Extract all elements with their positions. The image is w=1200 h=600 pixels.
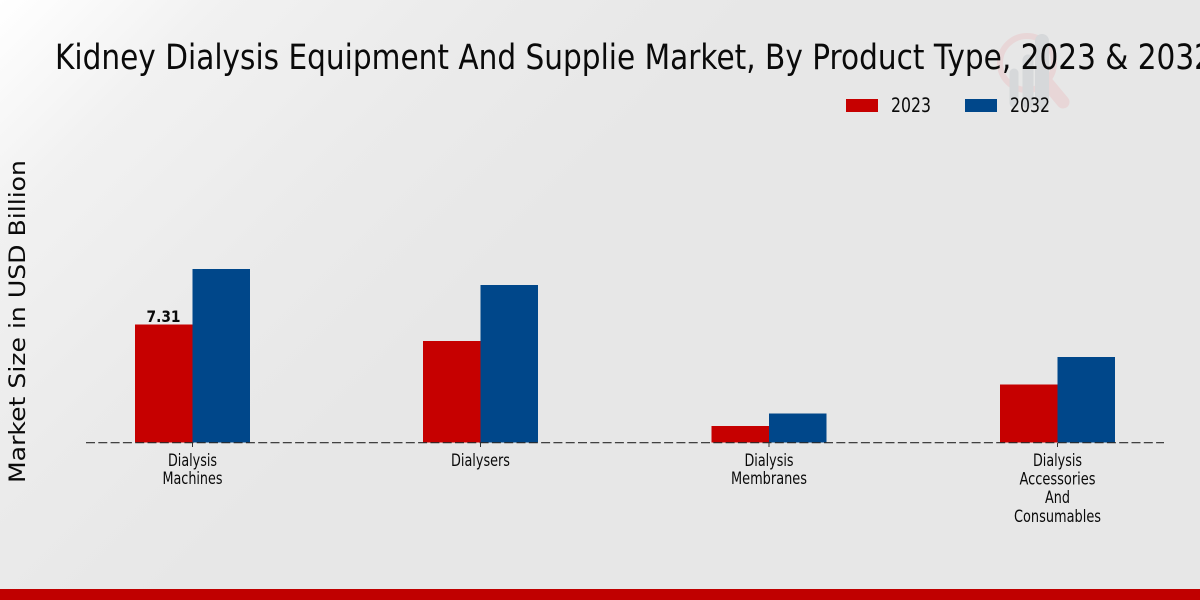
legend item: 2032 [965,94,1050,117]
group: Dialysis Membranes [712,414,826,442]
legend item: 2023: 2023 [891,94,931,117]
footer bar [0,589,1200,600]
category label: Dialysis Machines [162,451,222,488]
legend [846,94,1050,117]
group: Dialysis Accessories And Consumables [1000,357,1115,442]
bar chart [86,269,1164,447]
baseline [86,442,1164,444]
group: Dialysers [423,285,538,442]
category label: Dialysis Membranes: Dialysis [744,451,794,470]
group: Dialysis Machines [135,269,250,442]
category label: Dialysis Accessories And Consumables: And [1045,488,1070,507]
category label: Dialysis Accessories And Consumables: Dialysis [1033,451,1082,470]
legend item: 2023 [846,94,931,117]
category label: Dialysers: Dialysers [451,451,510,470]
category label: Dialysis Accessories And Consumables [1014,451,1101,526]
category label: Dialysis Membranes: Membranes [731,469,807,488]
category label: Dialysis Machines: Machines [162,469,222,488]
y-axis label: Market Size in USD Billion [5,160,31,483]
icon: watermark magnifier with bars [1000,36,1063,103]
category label: Dialysis Accessories And Consumables: Accessories [1020,470,1096,488]
legend item: 2032: 2032 [1010,94,1050,117]
value label: 7.31 [146,307,180,326]
category label: Dialysis Membranes [731,451,807,488]
category label: Dialysis Accessories And Consumables: Consumables [1014,507,1101,526]
category label: Dialysis Machines: Dialysis [168,451,217,470]
